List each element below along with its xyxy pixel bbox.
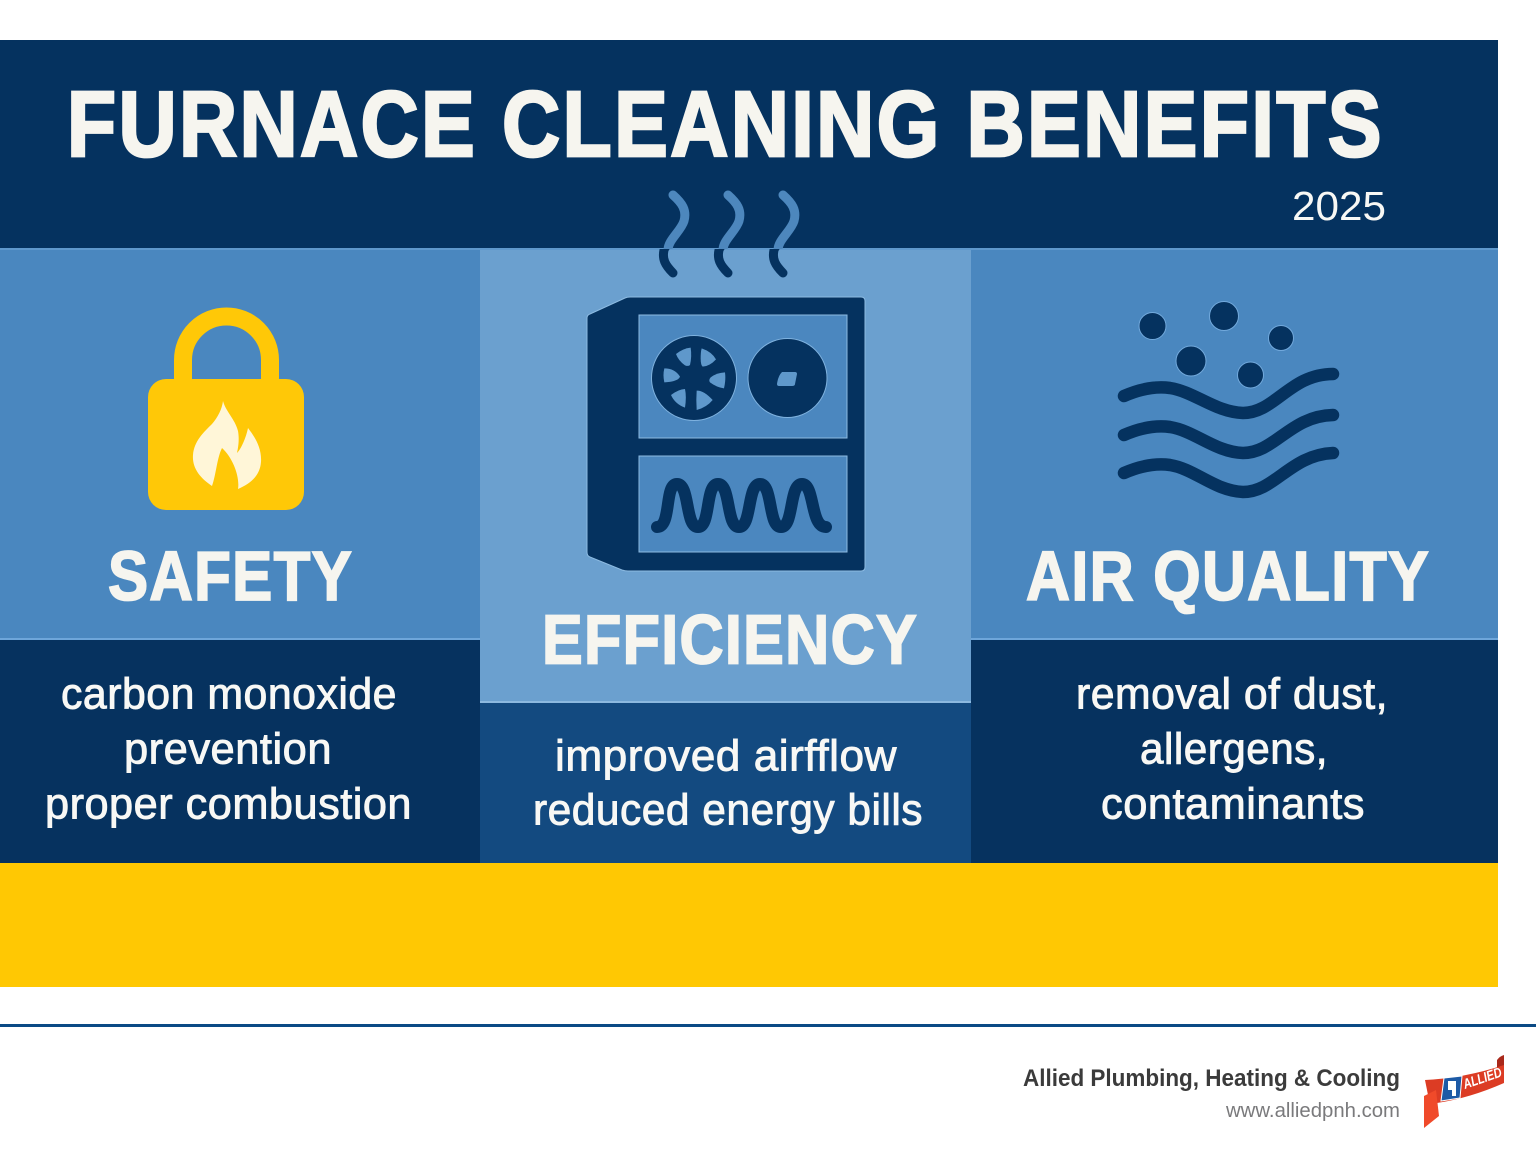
text: safety benefits: prevention xyxy=(124,724,332,774)
logo: allied ribbon xyxy=(1424,1055,1504,1128)
icon: padlock with flame xyxy=(148,316,304,510)
text: air quality benefits: allergens, xyxy=(1140,724,1328,774)
text: air quality benefits xyxy=(1076,670,1388,828)
damper xyxy=(748,338,827,418)
heating coil xyxy=(657,484,826,527)
icon: heat waves xyxy=(663,195,795,273)
header banner xyxy=(0,40,1498,250)
heading: efficiency: EFFICIENCY xyxy=(542,600,918,678)
icon: furnace xyxy=(587,297,865,571)
panel: air quality xyxy=(971,250,1498,863)
text: air quality benefits: contaminants xyxy=(1101,780,1365,828)
text: efficiency benefits: improved airfflow xyxy=(555,732,897,780)
footer website: www.alliedpnh.com xyxy=(1225,1099,1400,1122)
text: air quality benefits: removal of dust, xyxy=(1076,670,1388,718)
footer company name: Allied Plumbing, Heating & Cooling xyxy=(1023,1065,1400,1092)
yellow band xyxy=(0,863,1498,987)
panel: safety xyxy=(0,250,480,863)
heading: air quality: AIR QUALITY xyxy=(1026,537,1430,615)
panel: efficiency xyxy=(480,195,971,863)
year label: 2025 xyxy=(1292,183,1386,229)
text: safety benefits: carbon monoxide xyxy=(61,670,397,718)
footer rule xyxy=(0,1024,1536,1027)
fan xyxy=(652,336,736,420)
text: efficiency benefits xyxy=(533,732,923,834)
text: safety benefits xyxy=(45,670,412,828)
icon: air particles and waves xyxy=(1124,302,1333,492)
text: safety benefits: proper combustion xyxy=(45,780,412,828)
logo: allied ribbon: ALLIED xyxy=(1460,1064,1504,1092)
text: efficiency benefits: reduced energy bills xyxy=(533,786,923,834)
heading: safety: SAFETY xyxy=(108,537,353,615)
